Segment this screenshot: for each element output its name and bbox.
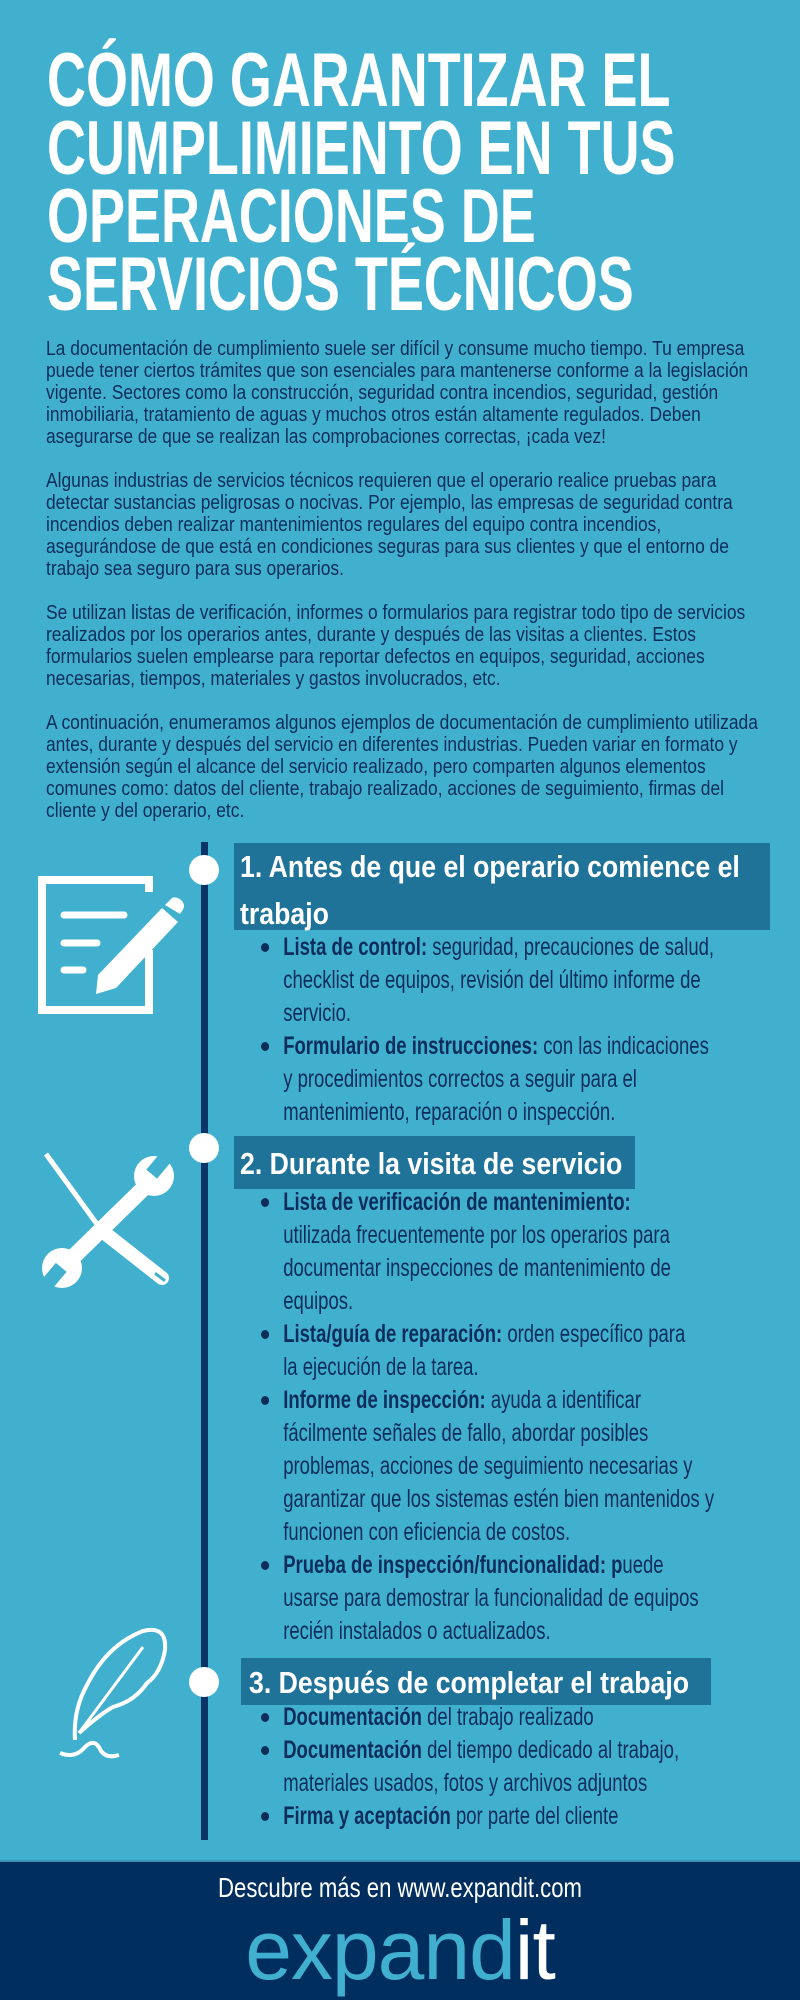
- icon: document with pencil: [38, 876, 184, 1014]
- bullets 1: Lista de control: seguridad, precauciones de salud,: [283, 933, 714, 961]
- bullets 2: garantizar que los sistemas estén bien mantenidos y: [283, 1485, 714, 1513]
- bullets 1: checklist de equipos, revisión del último informe de: [283, 966, 701, 994]
- title: CUMPLIMIENTO EN TUS: [47, 106, 676, 191]
- intro text: vigente. Sectores como la construcción, seguridad contra incendios, seguridad, gestión: [46, 382, 718, 404]
- bullets 2: [261, 1188, 714, 1645]
- intro text: incendios deben realizar mantenimientos regulares del equipo contra incendios,: [46, 514, 661, 536]
- intro text: inmobiliaria, tratamiento de aguas y muchos otros están altamente regulados. Deben: [46, 404, 701, 426]
- bullets 1: y procedimientos correctos a seguir para el: [283, 1065, 637, 1093]
- bullets 2: fácilmente señales de fallo, abordar posibles: [283, 1419, 648, 1447]
- intro text: comunes como: datos del cliente, trabajo realizado, acciones de seguimiento, firmas del: [46, 778, 724, 800]
- intro text: trabajo sea seguro para sus operarios.: [46, 558, 344, 580]
- heading 3: [241, 1658, 711, 1705]
- intro text: realizados por los operarios antes, durante y después de las visitas a clientes. Estos: [46, 624, 696, 646]
- icon: feather: [59, 1628, 168, 1758]
- heading 2: [234, 1136, 635, 1189]
- timeline dot 1: [189, 855, 219, 885]
- title: [47, 38, 676, 327]
- logo: expandit: [245, 1903, 555, 1997]
- bullets 2: Lista de verificación de mantenimiento:: [283, 1188, 631, 1216]
- intro text: detectar sustancias peligrosas o nocivas. Por ejemplo, las empresas de seguridad contra: [46, 492, 733, 514]
- bullets 1: [261, 933, 714, 1126]
- intro text: puede tener ciertos trámites que son esenciales para mantenerse conforme a la legislación: [46, 360, 748, 382]
- intro text: La documentación de cumplimiento suele ser difícil y consume mucho tiempo. Tu empresa: [46, 338, 744, 360]
- intro text: A continuación, enumeramos algunos ejemplos de documentación de cumplimiento utilizada: [46, 712, 758, 734]
- intro text: necesarias, tiempos, materiales y gastos involucrados, etc.: [46, 668, 501, 690]
- bullets 2: usarse para demostrar la funcionalidad de equipos: [283, 1584, 699, 1612]
- bullets 2: documentar inspecciones de mantenimiento de: [283, 1254, 671, 1282]
- bullets 2: funcionen con eficiencia de costos.: [283, 1518, 570, 1546]
- bullets 2: recién instalados o actualizados.: [283, 1617, 551, 1645]
- timeline dot 2: [189, 1133, 219, 1163]
- timeline line: [201, 842, 208, 1840]
- bullets 2: la ejecución de la tarea.: [283, 1353, 479, 1381]
- bullets 3: Firma y aceptación por parte del cliente: [283, 1802, 618, 1830]
- bullets 3: materiales usados, fotos y archivos adjuntos: [283, 1769, 647, 1797]
- bullets 3: Documentación del tiempo dedicado al trabajo,: [283, 1736, 679, 1764]
- intro text: Se utilizan listas de verificación, informes o formularios para registrar todo tipo de servicios: [46, 602, 745, 624]
- bullets 2: problemas, acciones de seguimiento necesarias y: [283, 1452, 692, 1480]
- bullets 3: Documentación del trabajo realizado: [283, 1703, 594, 1731]
- heading 3: 3. Después de completar el trabajo: [249, 1665, 689, 1700]
- bullets 2: Informe de inspección: ayuda a identificar: [283, 1386, 641, 1414]
- heading 1: [234, 843, 770, 930]
- intro text: asegurarse de que se realizan las comprobaciones correctas, ¡cada vez!: [46, 426, 606, 448]
- title: CÓMO GARANTIZAR EL: [47, 38, 670, 123]
- bullets 2: Prueba de inspección/funcionalidad: puede: [283, 1551, 664, 1579]
- title: SERVICIOS TÉCNICOS: [47, 242, 634, 327]
- intro text: cliente y del operario, etc.: [46, 800, 244, 822]
- icon: tools: [42, 1152, 174, 1288]
- heading 2: 2. Durante la visita de servicio: [240, 1146, 622, 1181]
- bullets 2: utilizada frecuentemente por los operarios para: [283, 1221, 670, 1249]
- heading 1: trabajo: [240, 896, 329, 931]
- bullets 2: equipos.: [283, 1287, 353, 1315]
- intro text: formularios suelen emplearse para reportar defectos en equipos, seguridad, acciones: [46, 646, 705, 668]
- footer link text: Descubre más en www.expandit.com: [218, 1872, 582, 1903]
- intro text: [46, 338, 758, 822]
- intro text: Algunas industrias de servicios técnicos requieren que el operario realice pruebas para: [46, 470, 716, 492]
- heading 1: 1. Antes de que el operario comience el: [240, 849, 740, 884]
- bullets 2: Lista/guía de reparación: orden específico para: [283, 1320, 685, 1348]
- bullets 3: [261, 1703, 679, 1830]
- timeline dot 3: [189, 1667, 219, 1697]
- footer: [0, 1860, 800, 2000]
- intro text: asegurándose de que está en condiciones seguras para sus clientes y que el entorno de: [46, 536, 729, 558]
- bullets 1: servicio.: [283, 999, 351, 1027]
- intro text: antes, durante y después del servicio en diferentes industrias. Pueden variar en formato y: [46, 734, 738, 756]
- title: OPERACIONES DE: [47, 174, 536, 259]
- bullets 1: mantenimiento, reparación o inspección.: [283, 1098, 615, 1126]
- bullets 1: Formulario de instrucciones: con las indicaciones: [283, 1032, 709, 1060]
- intro text: extensión según el alcance del servicio realizado, pero comparten algunos elementos: [46, 756, 706, 778]
